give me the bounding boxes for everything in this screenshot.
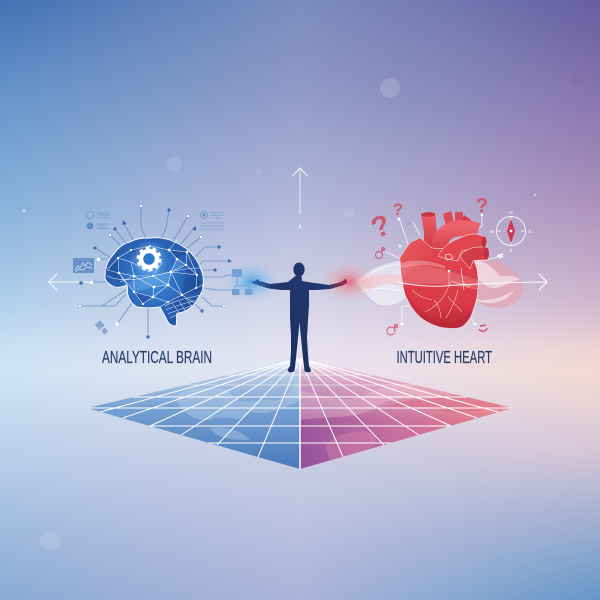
floor right half xyxy=(300,358,513,469)
flowchart xyxy=(232,269,252,295)
floor brain swirl overlay xyxy=(175,380,300,440)
floor heart swirl overlay xyxy=(300,386,505,462)
brain silhouette xyxy=(105,238,203,326)
vertical arrow up xyxy=(292,168,308,228)
heart vessels xyxy=(421,211,478,255)
icon: small chart xyxy=(73,258,94,273)
question marks xyxy=(367,195,488,245)
icon: compass xyxy=(490,210,532,253)
question marks: ? xyxy=(476,195,488,217)
heart connector nodes xyxy=(398,214,483,326)
icon: satellite xyxy=(95,320,108,335)
decorative bokeh particles xyxy=(22,76,581,550)
icon: compass: S xyxy=(509,248,513,253)
heart details xyxy=(398,234,489,332)
heading: intuitive heart: INTUITIVE HEART xyxy=(396,347,492,367)
heart connector lines xyxy=(386,215,500,324)
brain spokes xyxy=(80,206,249,337)
brain spoke nodes xyxy=(78,204,232,339)
horizontal arrow right xyxy=(398,274,547,290)
panel: brain diagram xyxy=(73,204,252,339)
heart body xyxy=(400,238,478,328)
floor left half xyxy=(87,358,300,469)
icon: compass: N xyxy=(509,210,513,215)
network nodes xyxy=(117,245,198,305)
heading: analytical brain: ANALYTICAL BRAIN xyxy=(102,347,212,367)
brain facets xyxy=(105,246,203,314)
floor center line xyxy=(299,358,301,469)
question marks: ? xyxy=(393,200,403,219)
icons: lists and circles top left xyxy=(86,212,110,230)
ribbons behind heart xyxy=(355,260,522,308)
person silhouette xyxy=(252,262,347,372)
icons: lists top right xyxy=(200,212,224,229)
cerebellum lines xyxy=(165,295,200,318)
neural network lines xyxy=(107,240,203,307)
icon: gear xyxy=(130,240,168,278)
floor grid xyxy=(80,358,520,469)
small icons xyxy=(376,222,503,335)
icon: compass: W xyxy=(490,229,495,234)
panel: heart diagram xyxy=(367,195,547,335)
hand glow red xyxy=(322,262,376,302)
horizontal arrow left xyxy=(48,274,92,290)
floor grid lines xyxy=(80,358,520,457)
icon: compass: E xyxy=(528,229,532,234)
hand glow blue xyxy=(225,262,279,302)
question marks: ? xyxy=(367,209,395,245)
